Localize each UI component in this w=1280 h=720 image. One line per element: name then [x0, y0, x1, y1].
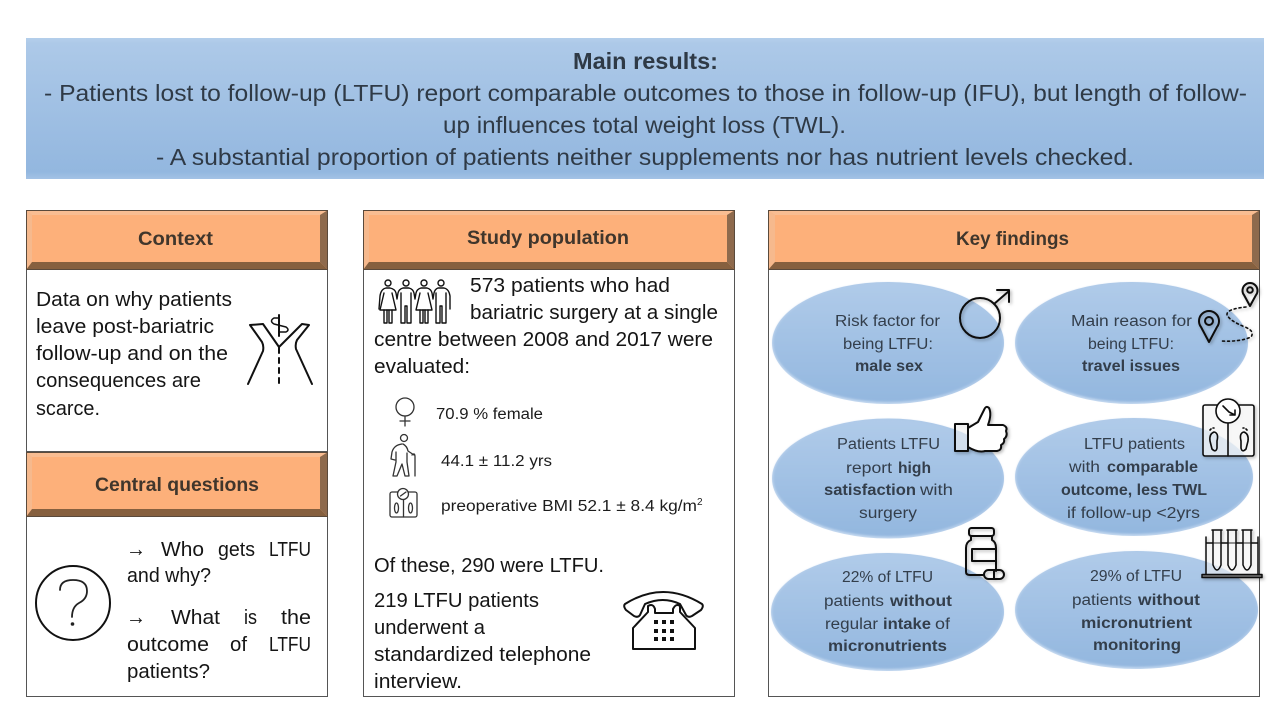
- finding: main reason: Main reason for: [1071, 313, 1192, 330]
- banner text: [44, 80, 1247, 170]
- questions text: [126, 536, 311, 683]
- finding: micronutrient intake: micronutrients: [828, 638, 947, 655]
- stat: preoperative BMI: 2: [697, 497, 703, 508]
- panel: study population: [363, 210, 735, 696]
- questions text: of: [230, 634, 247, 656]
- questions text: LTFU: [269, 634, 311, 656]
- finding: comparable outcome: LTFU patients: [1084, 436, 1185, 453]
- questions text: outcome: [127, 634, 209, 656]
- study intro text: 573 patients who had: [470, 275, 670, 297]
- banner text: - Patients lost to follow-up (LTFU) report comparable outcomes to those in follow-up (IFU), but length of follow-: [44, 80, 1247, 106]
- questions text: →: [126, 536, 146, 561]
- questions text: What: [171, 607, 220, 629]
- study intro text: evaluated:: [374, 356, 470, 378]
- finding: satisfaction: satisfaction: [824, 482, 916, 499]
- questions text: patients?: [127, 661, 210, 683]
- finding: comparable outcome: with: [1068, 459, 1100, 476]
- finding: micronutrient monitoring: patients: [1072, 592, 1132, 609]
- telephone interview text: interview.: [374, 671, 462, 693]
- questions text: is: [244, 607, 257, 629]
- finding: micronutrient monitoring: [1015, 551, 1258, 669]
- panel: key findings: [768, 210, 1262, 696]
- questions text: LTFU: [269, 539, 311, 561]
- finding: risk factor: being LTFU:: [843, 336, 933, 353]
- heading: central questions: Central questions: [95, 475, 259, 496]
- finding: satisfaction: surgery: [859, 505, 917, 522]
- heading: context: Context: [138, 229, 214, 250]
- telephone interview text: [374, 590, 591, 693]
- context text: leave post-bariatric: [36, 316, 214, 338]
- finding: satisfaction: high: [898, 460, 931, 477]
- finding: micronutrient intake: patients: [824, 593, 884, 610]
- finding: satisfaction: [772, 418, 1004, 538]
- study intro text: [374, 275, 718, 378]
- icon: weight scale: [1203, 399, 1254, 456]
- LTFU count text: Of these, 290 were LTFU.: [374, 555, 604, 577]
- finding: comparable outcome: comparable: [1107, 459, 1198, 476]
- questions text: Who: [161, 539, 204, 561]
- questions text: the: [281, 607, 311, 629]
- heading: key findings: [768, 210, 1260, 270]
- icon: test tubes in rack: [1202, 530, 1262, 578]
- questions text: gets: [218, 539, 255, 561]
- icon: supplement bottle and capsule: [966, 528, 1004, 579]
- icon: route with location pins: [1199, 283, 1258, 342]
- finding: micronutrient intake: [771, 553, 1004, 671]
- finding: micronutrient monitoring: micronutrient: [1081, 615, 1192, 632]
- icon: telephone: [624, 592, 703, 649]
- context text: scarce.: [36, 398, 100, 420]
- stat: age: 44.1 ± 11.2 yrs: [441, 453, 552, 470]
- finding: micronutrient intake: of: [935, 616, 951, 633]
- questions text: →: [126, 604, 146, 629]
- telephone interview text: underwent a: [374, 617, 486, 639]
- panel: context: [26, 210, 328, 452]
- context text: consequences are: [36, 370, 201, 392]
- finding: risk factor: [772, 282, 1004, 404]
- questions text: and why?: [127, 565, 211, 587]
- banner text: - A substantial proportion of patients neither supplements nor has nutrient levels checked.: [156, 144, 1134, 170]
- finding: comparable outcome: outcome, less TWL: [1061, 482, 1207, 499]
- icon: small weight scale: [390, 488, 417, 517]
- heading: study population: [363, 210, 735, 270]
- heading: central questions: [26, 452, 328, 517]
- heading: study population: Study population: [467, 228, 629, 249]
- telephone interview text: standardized telephone: [374, 644, 591, 666]
- banner text: up influences total weight loss (TWL).: [443, 112, 846, 138]
- context text: Data on why patients: [36, 289, 232, 311]
- icon: group of patients: [379, 280, 450, 323]
- heading: key findings: Key findings: [956, 229, 1069, 250]
- finding: comparable outcome: [1015, 418, 1253, 536]
- finding: risk factor: male sex: [855, 358, 923, 375]
- stat: preoperative BMI: preoperative BMI 52.1 ± 8.4 kg/m: [441, 498, 697, 515]
- finding: micronutrient intake: without: [889, 593, 952, 610]
- stat: female share: 70.9 % female: [436, 406, 543, 423]
- finding: micronutrient intake: regular: [825, 616, 878, 633]
- study intro text: centre between 2008 and 2017 were: [374, 329, 713, 351]
- telephone interview text: 219 LTFU patients: [374, 590, 539, 612]
- icon: thumbs up: [955, 407, 1007, 452]
- finding: satisfaction: Patients LTFU: [837, 436, 940, 453]
- icon: elderly person with cane: [391, 434, 415, 476]
- panel: central questions: [26, 452, 328, 696]
- finding: micronutrient monitoring: monitoring: [1093, 637, 1181, 654]
- finding: satisfaction: with: [919, 482, 953, 499]
- finding: main reason: travel issues: [1082, 358, 1180, 375]
- finding: risk factor: Risk factor for: [835, 313, 940, 330]
- context text: follow-up and on the: [36, 343, 228, 365]
- icon: surgical incision: [248, 315, 312, 384]
- finding: comparable outcome: if follow-up <2yrs: [1067, 505, 1200, 522]
- finding: satisfaction: report: [846, 460, 893, 477]
- study intro text: bariatric surgery at a single: [470, 302, 718, 324]
- icon: male symbol: [960, 290, 1009, 338]
- finding: main reason: [1015, 282, 1248, 404]
- finding: micronutrient monitoring: without: [1137, 592, 1200, 609]
- heading: context: [26, 210, 328, 270]
- icon: female symbol: [396, 398, 414, 426]
- finding: micronutrient intake: 22% of LTFU: [842, 569, 933, 586]
- finding: micronutrient monitoring: 29% of LTFU: [1090, 568, 1182, 585]
- icon: question mark: [36, 566, 110, 640]
- context text: [36, 289, 232, 420]
- banner heading: Main results:: [573, 48, 718, 74]
- banner: main results: [26, 38, 1264, 179]
- finding: main reason: being LTFU:: [1088, 336, 1174, 353]
- finding: micronutrient intake: intake: [883, 616, 931, 633]
